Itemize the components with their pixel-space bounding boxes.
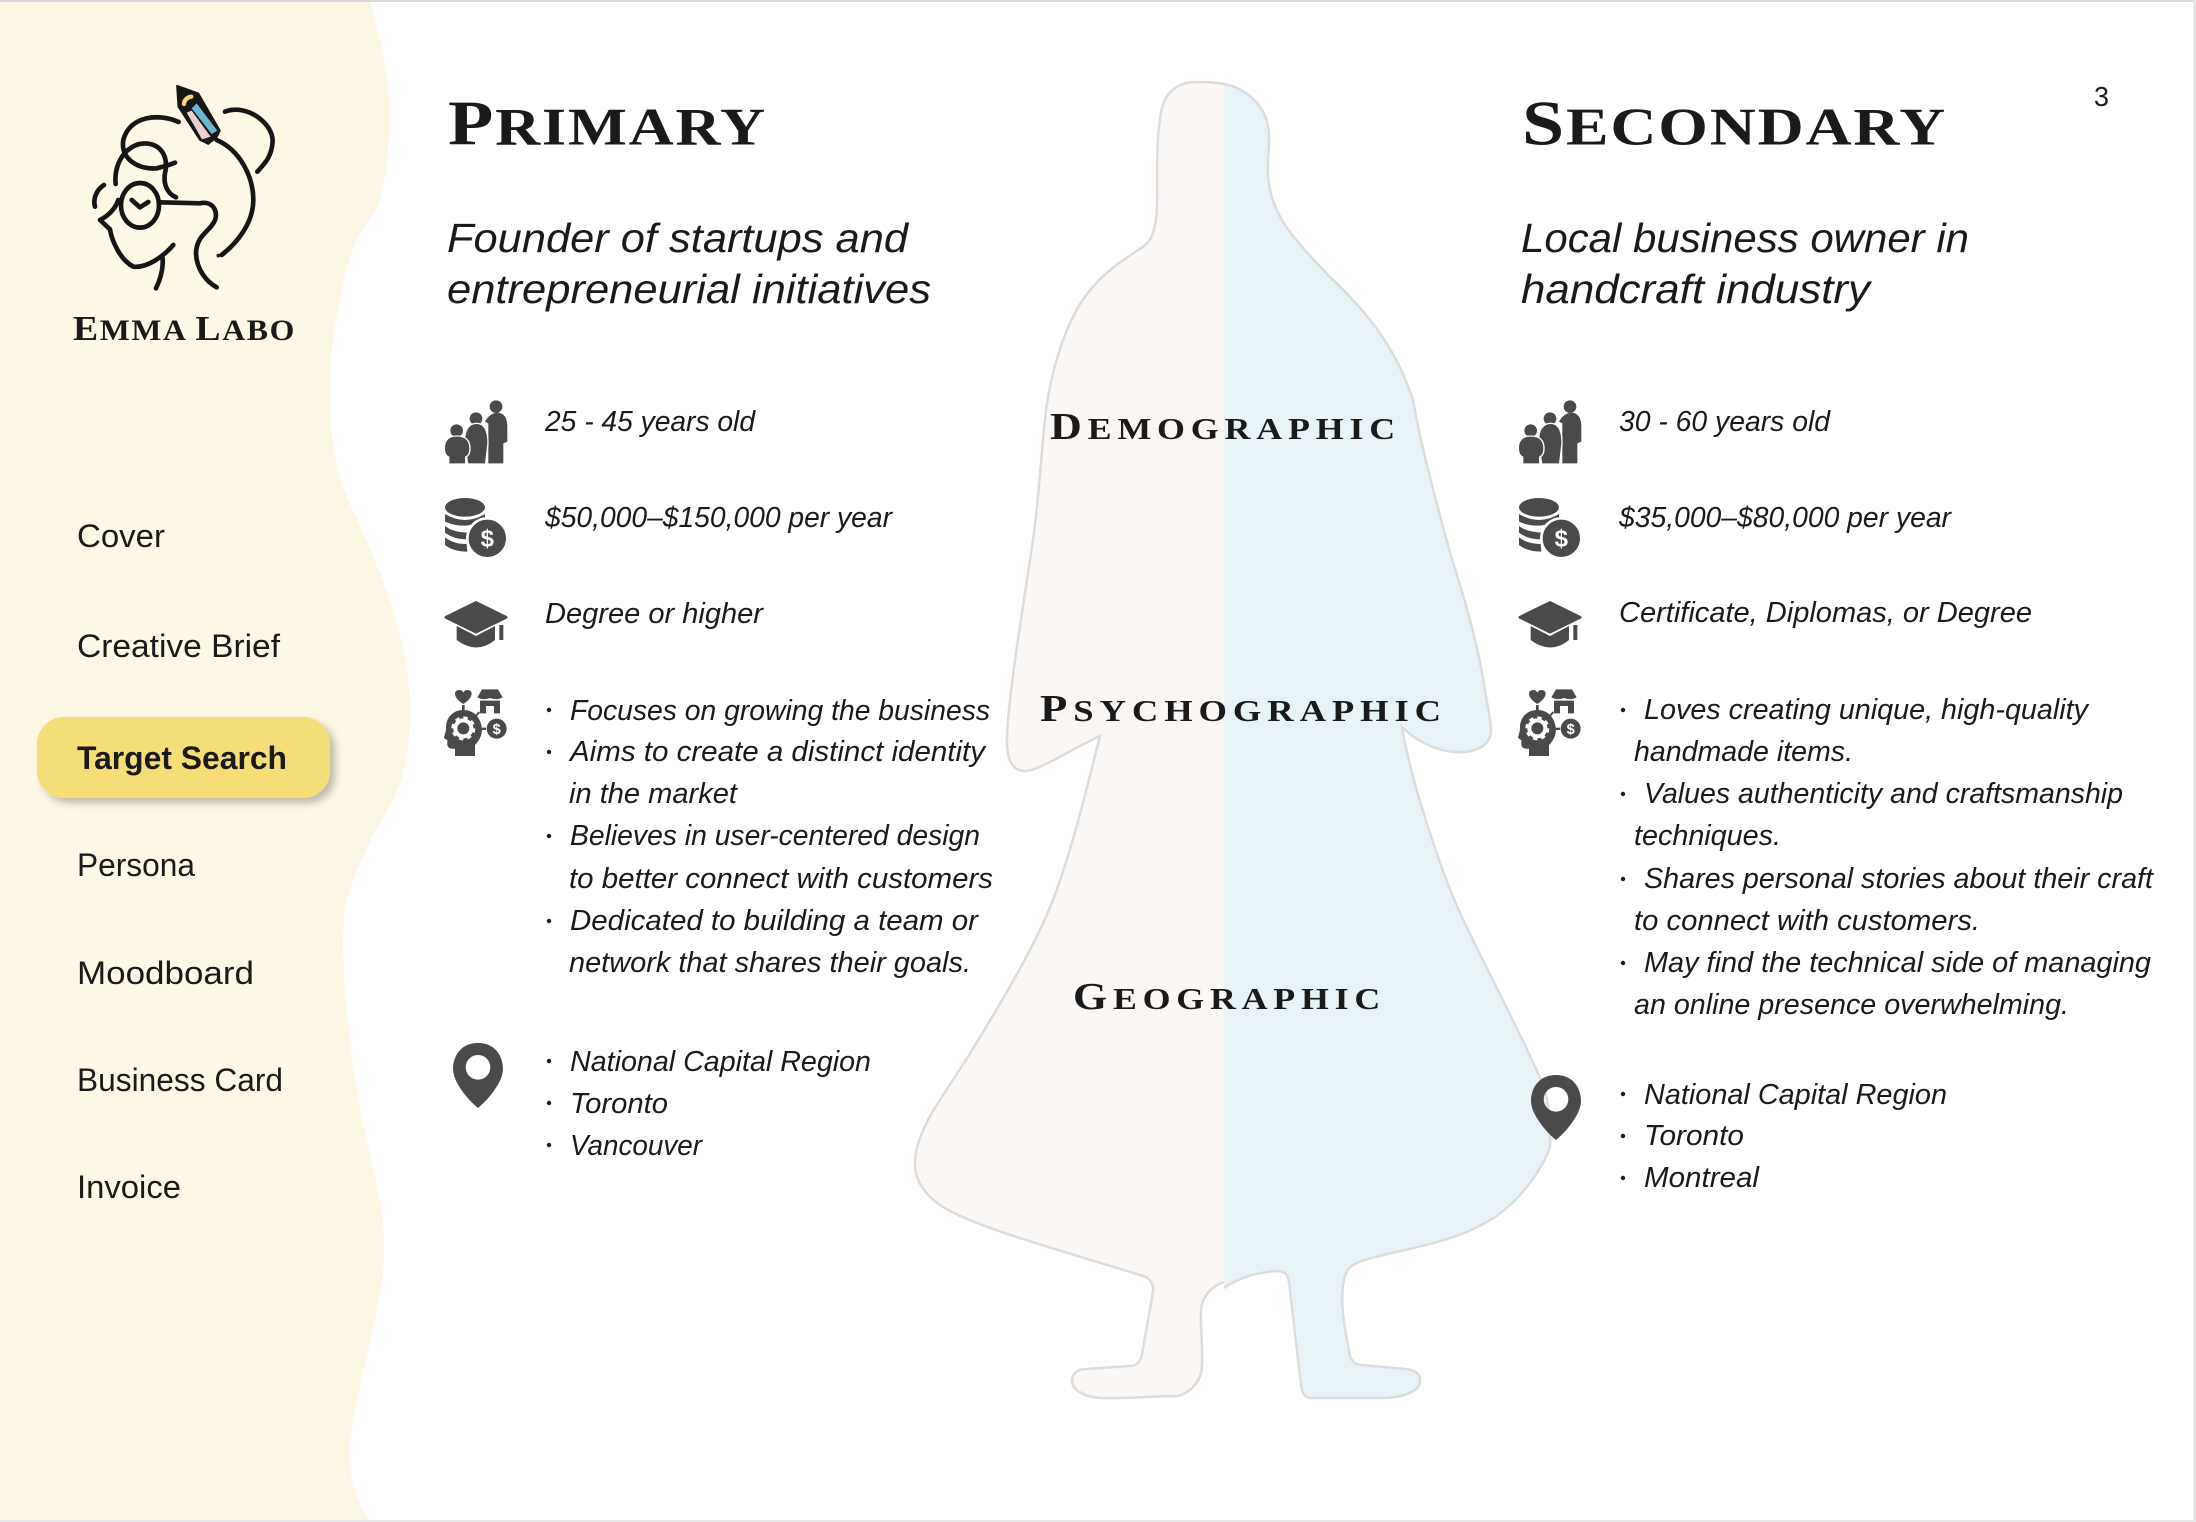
primary demographics text: $50,000–$150,000 per year (544, 502, 893, 534)
page number: 3 (2094, 81, 2109, 112)
navigation menu: Creative Brief (77, 628, 280, 664)
secondary demographics text: Certificate, Diplomas, or Degree (1619, 597, 2032, 629)
secondary demographics text: 30 - 60 years old (1619, 406, 1831, 438)
primary demographics text: Degree or higher (545, 598, 765, 630)
secondary psychographic list: Loves creating unique, high-quality (1644, 694, 2090, 726)
secondary demographics text: $35,000–$80,000 per year (1618, 502, 1952, 534)
primary psychographic list: Focuses on growing the business (570, 695, 990, 727)
primary psychographic list: Aims to create a distinct identity (568, 736, 987, 768)
figure silhouette: split body (915, 82, 1550, 1398)
secondary psychographic list (1621, 694, 2154, 1021)
active nav item: Target Search: Target Search (77, 740, 287, 776)
primary psychographic list: Dedicated to building a team or (570, 905, 980, 937)
primary psychographic list: to better connect with customers (569, 863, 993, 895)
navigation menu: Persona (77, 847, 195, 883)
secondary geographic list (1621, 1079, 1947, 1194)
navigation menu (37, 518, 330, 1205)
icon: age group (secondary) (1519, 400, 1581, 463)
primary psychographic list: in the market (569, 778, 738, 810)
icon: income coins (primary): $ (481, 526, 494, 553)
primary psychographic list: network that shares their goals. (569, 947, 971, 979)
primary geographic list (547, 1046, 871, 1162)
navigation menu: Invoice (77, 1169, 181, 1205)
secondary psychographic list: handmade items. (1634, 736, 1853, 768)
primary geographic list: National Capital Region (570, 1046, 871, 1078)
primary geographic list: Vancouver (570, 1130, 703, 1162)
heading: primary: PRIMARY (448, 88, 767, 158)
primary psychographic list: Believes in user-centered design (570, 820, 980, 852)
logo wordmark: EMMA LABO (73, 309, 296, 348)
icon: age group (primary) (445, 400, 507, 463)
icon: psychographic head (secondary) (1518, 689, 1581, 756)
primary demographics text (544, 406, 893, 630)
label: geographic: GEOGRAPHIC (1073, 976, 1386, 1018)
secondary persona description (1521, 215, 1969, 312)
primary persona description: entrepreneurial initiatives (447, 266, 931, 312)
icon: income coins (secondary): $ (1555, 526, 1568, 553)
navigation menu: Moodboard (77, 955, 254, 991)
secondary persona description: Local business owner in (1521, 215, 1969, 261)
icon: location pin (secondary) (1531, 1075, 1581, 1140)
icon: income coins (primary) (445, 498, 507, 558)
icon: location pin (primary) (453, 1043, 503, 1108)
secondary psychographic list: an online presence overwhelming. (1634, 989, 2069, 1021)
icon: psychographic head (primary): $ (493, 722, 501, 738)
secondary psychographic list: Shares personal stories about their craft (1644, 863, 2154, 895)
primary psychographic list (547, 695, 993, 979)
icon: psychographic head (secondary): $ (1567, 722, 1575, 738)
secondary geographic list: National Capital Region (1644, 1079, 1947, 1111)
heading: secondary: SECONDARY (1522, 88, 1947, 158)
icon: income coins (secondary) (1519, 498, 1581, 558)
primary persona description (447, 215, 931, 312)
secondary psychographic list: May find the technical side of managing (1644, 947, 2151, 979)
secondary geographic list: Toronto (1644, 1120, 1744, 1152)
primary geographic list: Toronto (570, 1088, 668, 1120)
secondary psychographic list: Values authenticity and craftsmanship (1644, 778, 2123, 810)
active nav item: Target Search (37, 717, 330, 798)
primary demographics text: 25 - 45 years old (544, 406, 756, 438)
secondary psychographic list: techniques. (1634, 820, 1781, 852)
secondary geographic list: Montreal (1644, 1162, 1760, 1194)
icon: graduation cap (secondary) (1520, 603, 1580, 647)
secondary demographics text (1618, 406, 2032, 629)
icon: psychographic head (primary) (444, 689, 507, 756)
secondary psychographic list: to connect with customers. (1634, 905, 1980, 937)
logo: woman with pencil (94, 86, 273, 288)
icon: graduation cap (primary) (446, 603, 506, 647)
primary persona description: Founder of startups and (447, 215, 909, 261)
panel: sidebar background (0, 2, 410, 1520)
label: psychographic: PSYCHOGRAPHIC (1040, 688, 1447, 730)
label: demographic: DEMOGRAPHIC (1050, 406, 1401, 448)
navigation menu: Cover (77, 518, 165, 554)
navigation menu: Business Card (77, 1062, 283, 1098)
secondary persona description: handcraft industry (1521, 266, 1873, 312)
